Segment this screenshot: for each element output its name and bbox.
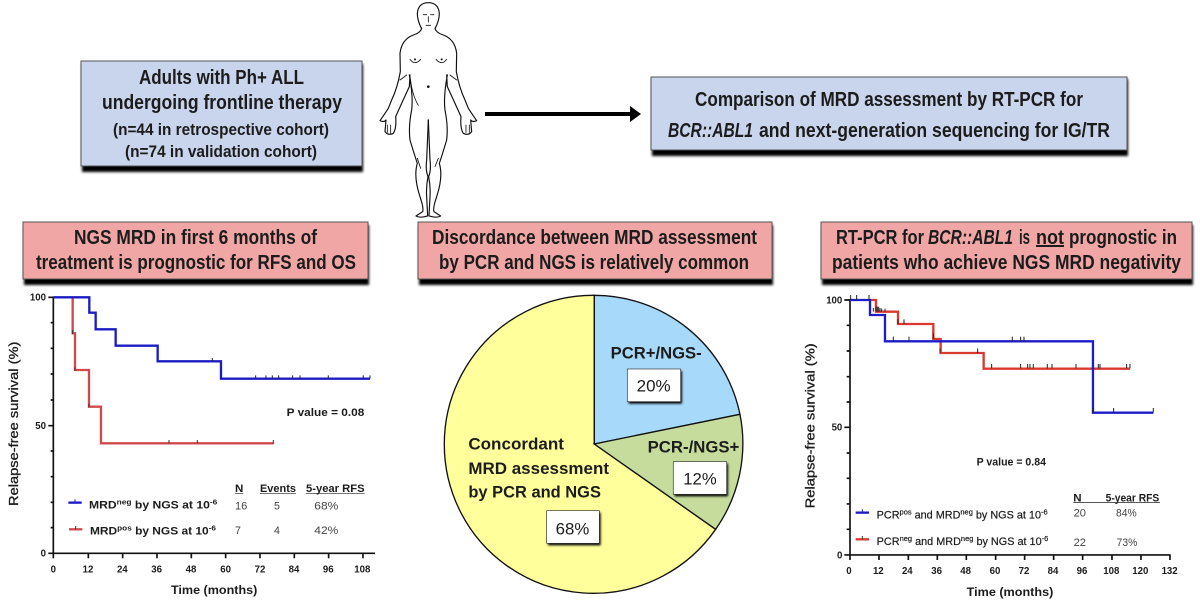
axis labels: 60 [990,566,1000,577]
chart: Kaplan-Meier RFS by NGS MRD [6,293,375,597]
legend: -6 [209,523,216,532]
legend: by NGS at 10 [973,509,1041,521]
axis labels: 100 [826,295,842,306]
results table: 5-year RFS [1106,493,1159,505]
legend: PCR [877,536,899,548]
panel: patient population: (n=44 in retrospective cohort) [113,121,329,139]
axis labels: 48 [960,566,972,577]
curve: MRD positive [73,297,273,444]
results table: 5-year RFS [306,483,365,495]
panel: comparison of MRD assessment: BCR::ABL1 [668,120,753,142]
panel: patient population: undergoing frontline therapy [102,92,343,114]
legend: and MRD [912,536,961,548]
axis labels: 0 [51,564,56,575]
chart: Kaplan-Meier RFS in NGS MRD negative patients [802,295,1178,599]
curve: PCR negative [870,300,1130,369]
heading: NGS MRD prognostic [23,222,369,285]
results table: Events [260,483,296,495]
heading: NGS MRD prognostic: NGS MRD in first 6 months of [74,227,317,249]
heading: discordance is common: by PCR and NGS is relatively common [439,252,749,274]
axis labels: 36 [151,564,163,575]
legend [68,497,217,537]
axis labels: 120 [1132,566,1148,577]
legend: MRD [89,499,113,511]
axis labels: 108 [354,564,371,575]
label: PCR-/NGS+: 12% [683,469,717,488]
results table [235,483,365,537]
curve: PCR positive [850,295,1153,413]
heading: RT-PCR not prognostic [821,222,1193,285]
legend: -6 [1042,534,1048,543]
legend: pos [900,507,912,516]
panel: comparison of MRD assessment: and next-generation sequencing for IG/TR [759,120,1110,142]
chart axes [48,297,375,558]
results table: 20 [1074,507,1086,519]
results table: 7 [235,525,241,537]
p value: P value = 0.84 [977,456,1047,468]
chart: pie of PCR and NGS concordance [444,295,743,593]
p value: P value = 0.08 [287,407,364,419]
axis labels: 48 [186,564,197,575]
results table: 5 [274,500,280,512]
legend: neg [960,507,973,516]
legend: neg [900,534,912,543]
label: PCR+/NGS-: PCR+/NGS- [611,343,702,362]
results table: 68% [314,500,339,512]
heading: RT-PCR not prognostic: RT-PCR for [836,227,924,249]
axis labels: 36 [931,566,943,577]
panel: comparison of MRD assessment: Comparison of MRD assessment by RT-PCR for [695,89,1083,111]
axis labels: 84 [289,564,300,575]
axis labels: 12 [873,566,884,577]
axis labels: 24 [117,564,128,575]
heading: NGS MRD prognostic: treatment is prognostic for RFS and OS [36,252,356,274]
heading: RT-PCR not prognostic: is [1019,227,1030,249]
legend: by NGS at 10 [973,536,1042,548]
axis labels: 84 [1048,566,1059,577]
results table: 16 [235,500,247,512]
legend: by NGS at 10 [132,525,209,537]
axis labels: 60 [220,564,231,575]
label: PCR-/NGS+ [648,438,740,496]
slice: concordant 68% [444,295,716,593]
results table: 73% [1117,537,1138,549]
label: concordant: MRD assessment [468,459,609,478]
results table: 22 [1074,537,1086,549]
label: concordant: by PCR and NGS [468,482,601,501]
label: PCR-/NGS+: PCR-/NGS+ [648,438,740,457]
results table: N [235,483,243,495]
legend: neg [961,534,973,543]
axis labels: 72 [255,564,265,575]
axis labels: 50 [35,421,46,432]
curve: MRD negative [53,297,370,379]
axis labels: 132 [1162,566,1178,577]
chart axes [844,299,1171,560]
results table [1073,493,1160,549]
heading: discordance is common: Discordance between MRD assessment [432,227,757,249]
label: concordant: Concordant [468,434,564,453]
legend: MRD [90,525,114,537]
axis labels: Relapse-free survival (%) [802,343,817,508]
results table: 42% [314,525,339,537]
legend: and MRD [912,509,961,521]
legend: by NGS at 10 [132,499,210,511]
axis labels: 96 [323,564,334,575]
legend [856,507,1048,548]
axis labels: 24 [902,566,913,577]
axis labels: 0 [41,549,46,560]
slice: PCR+/NGS- 20% [594,295,740,444]
label: concordant [468,434,609,545]
heading: discordance is common [418,222,773,285]
heading: RT-PCR not prognostic: prognostic in [1069,227,1177,249]
legend: -6 [1041,507,1048,516]
legend: pos [117,523,132,532]
axis labels [6,293,371,597]
axis labels: 100 [30,293,46,304]
icon: human body outline [380,3,477,217]
heading: RT-PCR not prognostic: not [1036,227,1064,249]
legend: -6 [210,497,217,506]
axis labels: 50 [832,423,842,434]
axis labels: 0 [837,550,842,561]
axis labels: Time (months) [171,583,257,597]
panel: patient population: Adults with Ph+ ALL [139,67,304,89]
heading: RT-PCR not prognostic: BCR::ABL1 [928,227,1013,249]
axis labels: 72 [1019,566,1029,577]
axis labels: Time (months) [967,585,1053,599]
axis labels: 0 [846,566,852,577]
label: PCR+/NGS- [611,343,702,404]
axis labels: Relapse-free survival (%) [6,342,21,506]
legend: PCR [877,509,899,521]
axis labels: 96 [1077,566,1088,577]
label: PCR+/NGS-: 20% [637,377,671,396]
axis labels [802,295,1178,599]
results table: N [1073,493,1082,505]
label: concordant: 68% [556,519,590,538]
slice: PCR-/NGS+ 12% [594,414,743,529]
arrow: population to comparison [485,106,641,122]
axis labels: 12 [83,564,93,575]
panel: comparison of MRD assessment [651,77,1128,156]
legend: neg [117,497,132,506]
results table: 84% [1116,507,1137,519]
panel: patient population: (n=74 in validation cohort) [125,143,317,161]
panel: patient population [81,61,363,172]
results table: 4 [274,525,280,537]
axis labels: 108 [1103,566,1120,577]
